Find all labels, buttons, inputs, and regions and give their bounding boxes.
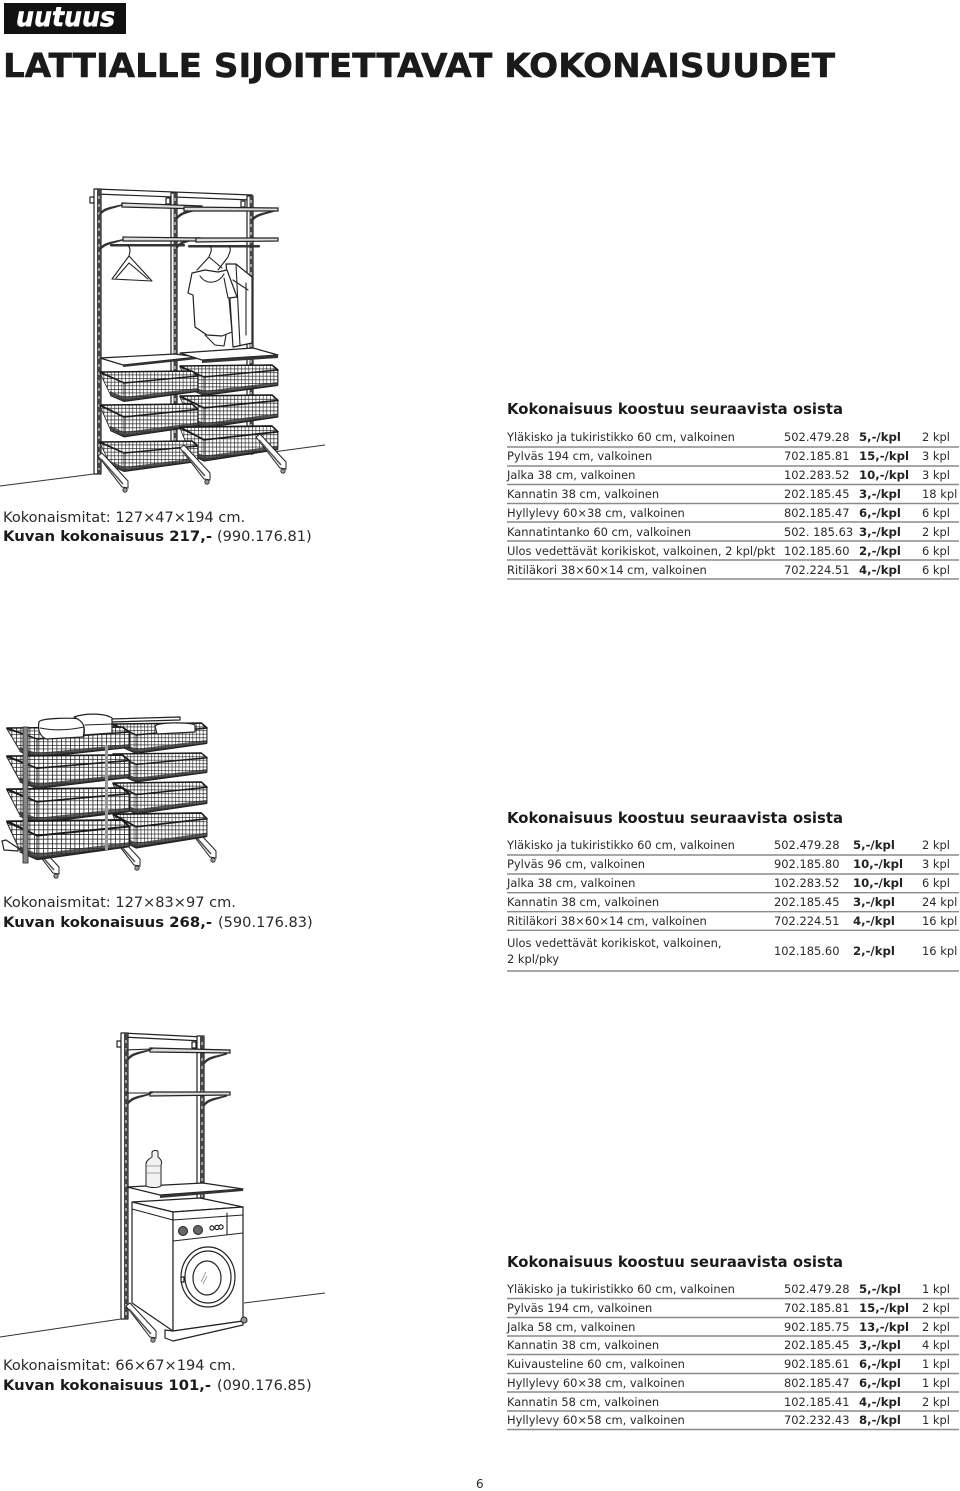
row: 102.283.52 [774,876,840,890]
towels [39,718,84,739]
row: 6 kpl [922,876,950,890]
row: Kannatin 58 cm, valkoinen [507,1395,659,1409]
row: 702.185.81 [784,449,850,463]
table 1: parts list [506,430,959,579]
row: 4,-/kpl [859,1395,901,1409]
row: Jalka 38 cm, valkoinen [506,468,635,482]
row [506,468,959,484]
row: Pylväs 194 cm, valkoinen [507,1301,652,1315]
clothes [197,246,230,270]
row: 10,-/kpl [853,857,903,871]
product info 1: (990.176.81) [217,528,312,545]
product info 1 [3,509,312,545]
row [507,895,959,912]
right baskets [113,723,207,754]
row: Jalka 58 cm, valkoinen [506,1320,635,1334]
row: 2 kpl [922,430,950,444]
illustration: basket unit with towels [2,714,216,878]
product info 3: Kokonaismitat: 66×67×194 cm. [3,1357,236,1374]
row [507,563,959,579]
washing machine [132,1198,243,1212]
row: 902.185.80 [774,857,840,871]
row: 16 kpl [922,914,957,928]
table 2: parts list [506,838,959,971]
wire baskets [180,365,278,396]
product info 3 [3,1357,312,1394]
row: Ritiläkori 38×60×14 cm, valkoinen [507,563,707,577]
posts [23,727,28,863]
row: 102.185.41 [784,1395,850,1409]
row: Kannatin 38 cm, valkoinen [507,1338,659,1352]
row: 5,-/kpl [853,838,895,852]
back rail [110,717,180,722]
feet [98,453,128,492]
row: 6 kpl [922,544,950,558]
row: 2,-/kpl [859,544,901,558]
row: Hyllylevy 60×38 cm, valkoinen [507,1376,685,1390]
posts [94,189,101,474]
row [507,1413,959,1430]
floor lines [0,445,325,486]
middle shelves [100,354,198,365]
row: 13,-/kpl [859,1320,909,1334]
row: 4,-/kpl [853,914,895,928]
left baskets [7,727,130,758]
row: 102.283.52 [784,468,850,482]
row: 6,-/kpl [859,1376,901,1390]
row: 5,-/kpl [859,430,901,444]
row [507,506,959,522]
row: 2 kpl/pky [507,952,559,966]
product info 2 [3,894,313,931]
row: 3,-/kpl [859,1338,901,1352]
row [507,936,959,971]
row: 102.185.60 [774,944,840,958]
row [506,838,959,855]
row [507,1376,959,1392]
row: 4,-/kpl [859,563,901,577]
row [507,1357,959,1374]
row [507,544,959,560]
badge: uutuus: uutuus [16,2,115,33]
row: Kannatin 38 cm, valkoinen [507,487,659,501]
row: 1 kpl [922,1357,950,1371]
row: 16 kpl [922,944,957,958]
row: 3,-/kpl [859,525,901,539]
upper shelves [99,204,123,216]
row: 6,-/kpl [859,1357,901,1371]
row: 202.185.45 [774,895,840,909]
row: 3,-/kpl [859,487,901,501]
row: 802.185.47 [784,506,850,520]
row: 18 kpl [922,487,957,501]
row: 15,-/kpl [859,1301,909,1315]
row: Yläkisko ja tukiristikko 60 cm, valkoinen [506,1282,735,1296]
row: Ritiläkori 38×60×14 cm, valkoinen [507,914,707,928]
row [507,487,959,504]
row: 1 kpl [922,1282,950,1296]
row: Jalka 38 cm, valkoinen [506,876,635,890]
row [506,430,959,447]
row: 1 kpl [922,1376,950,1390]
icon: foot [126,1303,156,1342]
row: 2,-/kpl [853,944,895,958]
empty hanger [112,246,152,281]
row: 8,-/kpl [859,1413,901,1427]
row [506,1282,959,1298]
row: 3 kpl [922,468,950,482]
row [506,1320,959,1336]
row: 6,-/kpl [859,506,901,520]
heading: table 1: Kokonaisuus koostuu seuraavista osista [507,400,843,418]
row: 902.185.75 [784,1320,850,1334]
row: Kannatintanko 60 cm, valkoinen [507,525,691,539]
row: Hyllylevy 60×38 cm, valkoinen [507,506,685,520]
row: 202.185.45 [784,1338,850,1352]
row: 2 kpl [922,838,950,852]
row: 902.185.61 [784,1357,850,1371]
row: 702.224.51 [774,914,840,928]
top rail [96,189,252,200]
row [507,1301,959,1318]
row [507,449,959,466]
product info 1: Kokonaismitat: 127×47×194 cm. [3,509,245,526]
row [507,525,959,541]
row [507,857,959,874]
row: 24 kpl [922,895,957,909]
row: 2 kpl [922,1301,950,1315]
product info 2: Kuvan kokonaisuus 268,- [3,914,212,931]
product info 3: (090.176.85) [217,1377,312,1394]
row [507,914,959,930]
row: 2 kpl [922,1320,950,1334]
row: 15,-/kpl [859,449,909,463]
row: 3,-/kpl [853,895,895,909]
row: Hyllylevy 60×58 cm, valkoinen [507,1413,685,1427]
row: 2 kpl [922,525,950,539]
row: Yläkisko ja tukiristikko 60 cm, valkoinen [506,430,735,444]
row: 702.232.43 [784,1413,850,1427]
product info 1: Kuvan kokonaisuus 217,- [3,528,212,545]
product info 2: Kokonaismitat: 127×83×97 cm. [3,894,236,911]
row [507,1395,959,1411]
row: 6 kpl [922,563,950,577]
row: Pylväs 96 cm, valkoinen [507,857,645,871]
row: Ulos vedettävät korikiskot, valkoinen, 2 kpl/pkt [507,544,776,558]
rails [110,244,185,246]
row: 502.479.28 [774,838,840,852]
shelves [127,1049,151,1061]
row: 10,-/kpl [859,468,909,482]
row: Ulos vedettävät korikiskot, valkoinen, [507,936,721,950]
product info 2: (590.176.83) [218,914,313,931]
row: 502.479.28 [784,1282,850,1296]
posts [121,1033,128,1319]
row: 6 kpl [922,506,950,520]
table 3: parts list [506,1282,959,1430]
row: 2 kpl [922,1395,950,1409]
row: 3 kpl [922,857,950,871]
row: 502.479.28 [784,430,850,444]
heading: table 3: Kokonaisuus koostuu seuraavista osista [507,1253,843,1271]
row: 3 kpl [922,449,950,463]
product info 3: Kuvan kokonaisuus 101,- [3,1377,211,1394]
illustration: shelving over washing machine [0,1033,325,1342]
page number: 6 [476,1477,484,1491]
row: 1 kpl [922,1413,950,1427]
title: LATTIALLE SIJOITETTAVAT KOKONAISUUDET [3,46,836,85]
heading: table 2: Kokonaisuus koostuu seuraavista osista [507,809,843,827]
illustration: shelving with hanging rail and wire baskets [0,189,325,492]
row: 102.185.60 [784,544,850,558]
row: 802.185.47 [784,1376,850,1390]
floor lines [0,1293,325,1337]
row [506,876,959,893]
row: 5,-/kpl [859,1282,901,1296]
row: 10,-/kpl [853,876,903,890]
row [507,1338,959,1354]
row: 702.185.81 [784,1301,850,1315]
row: 4 kpl [922,1338,950,1352]
row: Kannatin 38 cm, valkoinen [507,895,659,909]
row: 702.224.51 [784,563,850,577]
icon: bottle [146,1150,162,1188]
row: 202.185.45 [784,487,850,501]
feet [2,840,18,851]
row: Pylväs 194 cm, valkoinen [507,449,652,463]
row: Yläkisko ja tukiristikko 60 cm, valkoinen [506,838,735,852]
top rail [122,1033,203,1041]
row: Kuivausteline 60 cm, valkoinen [507,1357,685,1371]
row: 502. 185.63 [784,525,853,539]
